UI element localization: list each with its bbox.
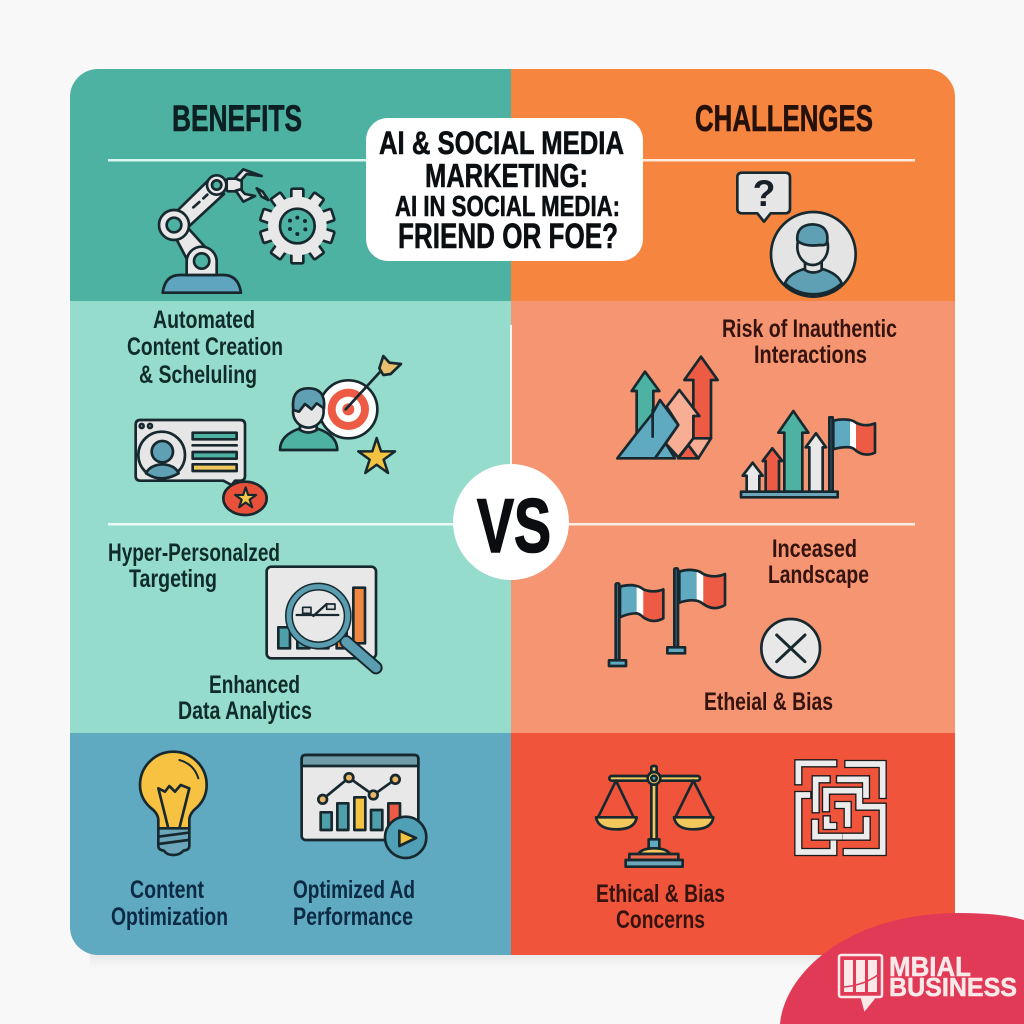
label: hyper-personalized targeting	[108, 539, 280, 593]
icon: profile card with star badge	[136, 420, 267, 515]
icon: two flags	[609, 568, 725, 666]
label: content optimization: Optimization	[111, 903, 228, 931]
label: etheial and bias: Etheial & Bias	[704, 688, 833, 716]
VS badge	[453, 464, 569, 580]
centre vertical rule	[510, 325, 512, 470]
panel: coloured comparison grid	[70, 69, 955, 955]
icon: person with question bubble: ?	[753, 172, 775, 214]
label: automated content creation: Content Creation	[127, 333, 283, 361]
logo: mbial business badge: BUSINESS	[889, 972, 1017, 1002]
label: content optimization: Content	[130, 876, 205, 904]
panel: challenges middle	[511, 301, 955, 733]
label: risk of inauthentic interactions: Interactions	[754, 341, 867, 369]
VS badge: VS	[477, 484, 551, 569]
icon: robot arm and gear	[159, 169, 335, 293]
label: enhanced data analytics: Enhanced	[209, 671, 300, 699]
panel: benefits middle	[70, 301, 511, 733]
middle rule left	[108, 523, 458, 526]
title card: AI IN SOCIAL MEDIA:	[395, 191, 620, 223]
title card: FRIEND OR FOE?	[398, 217, 618, 256]
icon: ad performance dashboard	[302, 755, 426, 858]
label: ethical and bias concerns: Ethical & Bias	[596, 880, 725, 908]
label: automated content creation	[127, 306, 283, 389]
header rule right	[642, 159, 915, 162]
panel: challenges header	[511, 69, 955, 301]
icon: person with question bubble	[737, 172, 856, 297]
label: ethical and bias concerns	[596, 880, 725, 934]
panel: benefits bottom	[70, 733, 511, 955]
label: inceased landscape	[768, 535, 869, 589]
middle rule right	[565, 523, 915, 526]
label: automated content creation: & Scheluling	[139, 361, 257, 389]
label: optimized ad performance: Performance	[293, 903, 413, 931]
title card: AI & SOCIAL MEDIA	[379, 125, 624, 161]
label: risk of inauthentic interactions	[722, 315, 897, 369]
label: content optimization	[111, 876, 228, 931]
title card	[366, 118, 643, 261]
panel: benefits header	[70, 69, 511, 301]
icon: target, person and star	[280, 356, 401, 473]
title card: MARKETING:	[425, 157, 588, 194]
icon: rising arrows with flag	[741, 411, 875, 497]
heading: benefits: BENEFITS	[172, 98, 302, 139]
icon: tangled arrows	[617, 357, 718, 458]
logo: mbial business badge: MBIAL	[889, 951, 971, 982]
icon: balance scale	[596, 766, 713, 867]
icon: cross in circle	[761, 619, 820, 678]
label: optimized ad performance: Optimized Ad	[293, 876, 415, 904]
icon: maze	[798, 763, 883, 852]
label: hyper-personalized targeting: Targeting	[129, 565, 217, 593]
icon: light bulb	[140, 752, 207, 855]
panel: challenges bottom	[511, 733, 955, 955]
logo: mbial business badge	[780, 913, 1024, 1024]
heading: challenges: CHALLENGES	[695, 98, 873, 139]
label: enhanced data analytics: Data Analytics	[178, 697, 312, 725]
label: inceased landscape: Landscape	[768, 561, 869, 589]
icon: magnifier over bar chart	[267, 567, 376, 668]
label: automated content creation: Automated	[153, 306, 255, 334]
label: inceased landscape: Inceased	[772, 535, 857, 563]
logo mark	[839, 955, 882, 1009]
label: risk of inauthentic interactions: Risk of Inauthentic	[722, 315, 897, 343]
label: ethical and bias concerns: Concerns	[616, 906, 705, 934]
label: enhanced data analytics	[178, 671, 312, 725]
header rule left	[108, 159, 368, 162]
label: hyper-personalized targeting: Hyper-Personalzed	[108, 539, 280, 567]
label: optimized ad performance	[293, 876, 415, 931]
